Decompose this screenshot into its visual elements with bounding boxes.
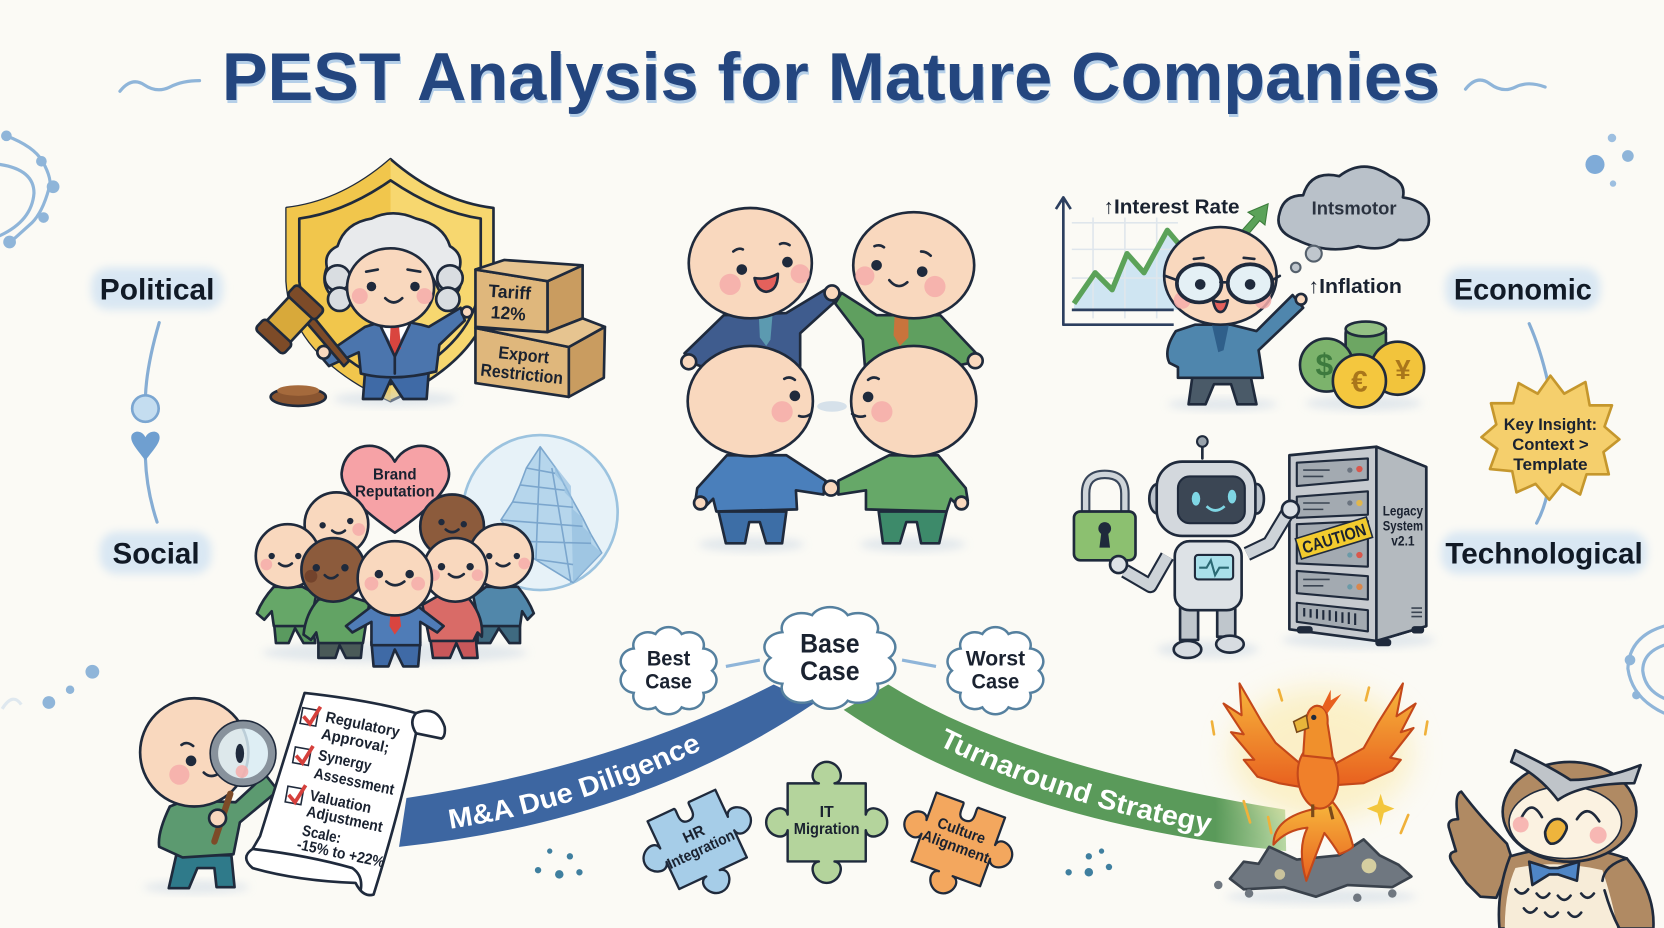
eyes xyxy=(1522,808,1599,821)
icon: legacy server: System xyxy=(1383,519,1423,534)
belly xyxy=(1505,864,1617,928)
flame wisps xyxy=(1212,688,1427,833)
callout: key insight badge xyxy=(1481,376,1619,500)
icon: currency coins xyxy=(1300,322,1424,411)
icon: export restriction box: Export xyxy=(497,342,550,367)
icon: brand reputation heart: Reputation xyxy=(355,484,435,501)
character: bottom right partner xyxy=(824,346,976,552)
character: top left partner xyxy=(681,208,839,369)
icon: legacy server: v2.1 xyxy=(1391,533,1415,548)
ribbon: M&A due diligence xyxy=(399,684,814,847)
body xyxy=(1499,848,1653,928)
right wing xyxy=(1602,858,1627,928)
head xyxy=(1503,762,1636,862)
label: Social: Social xyxy=(113,537,200,570)
puzzle piece: culture alignment: Culture xyxy=(935,815,988,848)
shadow smudges xyxy=(817,401,847,412)
title: PEST Analysis for Mature Companies xyxy=(222,40,1440,115)
decoration: dots near ribbon left xyxy=(535,848,583,879)
chart: rising interest rate xyxy=(1056,197,1268,325)
beak xyxy=(1545,819,1567,844)
icon: padlock xyxy=(1074,474,1135,573)
ribbon: turnaround strategy xyxy=(844,684,1286,852)
callout: key insight badge: Template xyxy=(1513,455,1588,474)
icon: currency coins: € xyxy=(1351,366,1368,399)
decoration: bottom left dots xyxy=(2,665,99,709)
brow tufts xyxy=(1511,750,1641,800)
puzzle piece: IT migration: Migration xyxy=(794,821,860,838)
label: Technological: Technological xyxy=(1445,537,1643,570)
character: top right partner xyxy=(835,212,983,368)
puzzle piece: HR integration: Integration xyxy=(665,827,737,873)
icon: tariff box: Tariff xyxy=(488,281,533,304)
puzzle piece: IT migration: IT xyxy=(820,804,834,821)
checklist items: Assessment xyxy=(312,765,396,799)
decoration: top right dots xyxy=(1585,134,1634,187)
icon: glass globe with pyramid xyxy=(463,435,618,590)
panel: due diligence xyxy=(140,693,445,895)
checklist items: Synergy xyxy=(316,747,373,775)
checklist items: Approval; xyxy=(320,726,391,757)
callout: key insight badge: Key Insight: xyxy=(1504,415,1597,434)
person dark face xyxy=(301,538,369,658)
panel: social illustration xyxy=(256,435,618,666)
mascot: owl xyxy=(1449,750,1653,928)
decoration: bottom right orbit xyxy=(1625,626,1664,713)
icon: export restriction box: Restriction xyxy=(480,360,564,388)
icon: currency coins: ¥ xyxy=(1395,354,1411,385)
person far right xyxy=(469,524,534,643)
text: interest rate: ↑Interest Rate xyxy=(1104,195,1239,218)
icon: thought cloud xyxy=(1278,167,1429,272)
connector: Political to Social xyxy=(131,323,160,522)
character: robot xyxy=(1125,436,1299,658)
ribbon: M&A due diligence: M&A Due Diligence xyxy=(448,738,700,828)
icon: thought cloud: Intsmotor xyxy=(1312,198,1397,218)
cloud: base case: Base xyxy=(800,629,860,659)
person red xyxy=(422,538,487,658)
character: detective xyxy=(140,698,278,894)
checklist items: Regulatory xyxy=(324,709,402,741)
phoenix bird xyxy=(1224,683,1416,881)
bow tie xyxy=(1529,862,1579,885)
panel: checklist scroll xyxy=(246,693,445,895)
sparkles xyxy=(1367,794,1394,826)
chest marks xyxy=(1515,889,1594,917)
callout: caution tape: CAUTION xyxy=(1300,520,1368,558)
puzzle piece: HR integration: HR xyxy=(680,822,708,847)
panel: economic illustration xyxy=(1056,167,1429,411)
icon: brand reputation heart: Brand xyxy=(373,467,417,484)
puzzle piece: IT migration xyxy=(766,762,887,883)
checklist items: Valuation xyxy=(308,787,373,817)
checklist items: -15% to +22% xyxy=(295,836,386,871)
label: Political: Political xyxy=(100,273,214,306)
icon: wig xyxy=(324,213,461,303)
cloud: best case xyxy=(621,627,716,714)
cloud: best case: Case xyxy=(645,671,692,694)
panel: technological illustration xyxy=(1074,436,1435,658)
label: Social xyxy=(100,532,211,574)
title squiggle right xyxy=(1466,80,1545,90)
icon: gavel sound block xyxy=(271,385,326,406)
panel: central handshake team xyxy=(681,208,983,552)
icon: magnifying glass xyxy=(210,721,276,842)
decoration: top left orbit xyxy=(0,131,59,248)
check marks xyxy=(285,707,321,805)
back right head xyxy=(420,495,484,558)
cloud: base case xyxy=(764,607,895,709)
checklist items xyxy=(295,709,402,871)
decoration: dots near ribbon right xyxy=(1065,848,1112,877)
phoenix glow xyxy=(1231,688,1411,819)
back left head xyxy=(305,492,368,556)
checklist items: Adjustment xyxy=(305,803,384,836)
cloud: worst case: Case xyxy=(972,671,1019,694)
connector: Economic to Technological xyxy=(1529,324,1548,523)
rubble xyxy=(1214,839,1417,904)
person center xyxy=(346,541,444,666)
cloud: best case: Best xyxy=(647,647,690,670)
title squiggle left xyxy=(120,81,200,91)
person far left xyxy=(256,524,319,643)
title: PEST Analysis for Mature Companies xyxy=(223,43,1441,118)
puzzle piece: culture alignment xyxy=(886,786,1024,912)
icon: legacy server: Legacy xyxy=(1383,504,1423,519)
icon: legacy server xyxy=(1282,447,1435,648)
icon: currency coins: $ xyxy=(1316,347,1334,383)
puzzle piece: HR integration xyxy=(629,781,774,916)
ribbon: turnaround strategy: Turnaround Strategy xyxy=(944,728,1212,836)
panel: political illustration xyxy=(255,159,605,406)
label: Political xyxy=(91,267,223,310)
raised wing xyxy=(1449,792,1512,898)
group: stakeholder crowd xyxy=(256,492,534,666)
icon: shield xyxy=(287,159,493,401)
checklist items: Scale: xyxy=(301,822,343,847)
icon: gavel xyxy=(255,284,349,366)
character: economist xyxy=(1164,227,1306,411)
icon: export restriction box xyxy=(475,318,605,397)
text: inflation: ↑Inflation xyxy=(1308,275,1402,298)
callout: key insight badge: Context > xyxy=(1512,435,1589,454)
face xyxy=(1509,786,1622,858)
icon: tariff box xyxy=(475,260,583,332)
character: judge xyxy=(323,213,472,406)
panel: phoenix xyxy=(1212,683,1427,904)
puzzle piece: culture alignment: Alignment xyxy=(920,827,991,867)
cloud: worst case: Worst xyxy=(966,647,1025,670)
connector: scenario links xyxy=(726,660,936,666)
icon: tariff box: 12% xyxy=(490,302,526,325)
character: bottom left partner xyxy=(688,346,826,552)
icon: brand reputation heart xyxy=(342,446,449,533)
cloud: base case: Case xyxy=(800,656,860,686)
cloud: worst case xyxy=(948,627,1043,714)
label: Economic: Economic xyxy=(1454,273,1592,306)
